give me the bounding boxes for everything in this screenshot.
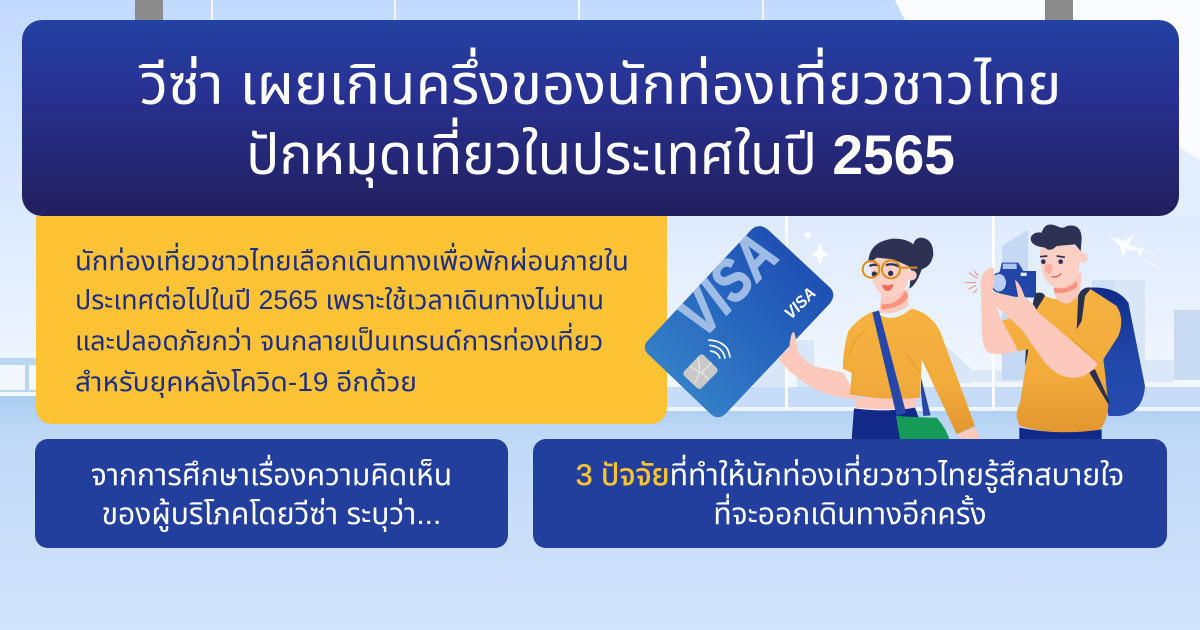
panel: three factors: ที่จะออกเดินทางอีกครั้ง [713,498,987,531]
icon: Visa card [645,220,833,417]
panel: yellow summary text: ประเทศต่อไปในปี 2565 เพราะใช้เวลาเดินทางไม่นาน [75,285,604,315]
panel: three factors [533,439,1167,548]
panel: yellow summary text: นักท่องเที่ยวชาวไทยเลือกเดินทางเพื่อพักผ่อนภายใน [75,246,629,276]
icon: Visa card: VISA [664,220,791,348]
heading line 1: วีซ่า เผยเกินครึ่งของนักท่องเที่ยวชาวไทย [140,53,1061,116]
icon: Visa card: VISA [780,283,820,323]
panel: study source [35,439,508,548]
panel: title banner [22,20,1179,216]
icon: airplane [1111,234,1160,269]
panel: study source: ของผู้บริโภคโดยวีซ่า ระบุว่า... [102,498,441,531]
illustration: Visa card and two travellers [644,224,1160,439]
panel: three factors: 3 ปัจจัยที่ทำให้นักท่องเที่ยวชาวไทยรู้สึกสบายใจ [576,459,1124,492]
panel: yellow summary text: สำหรับยุคหลังโควิด-19 อีกด้วย [75,367,417,397]
man traveller with camera [965,224,1145,439]
panel: yellow summary text [36,216,667,424]
woman traveller [778,238,980,439]
icon: sparkles [803,230,829,265]
panel: study source: จากการศึกษาเรื่องความคิดเห็น [91,459,452,492]
heading line 2: ปักหมุดเที่ยวในประเทศในปี 2565 [246,123,955,186]
panel: yellow summary text: และปลอดภัยกว่า จนกลายเป็นเทรนด์การท่องเที่ยว [75,326,603,356]
